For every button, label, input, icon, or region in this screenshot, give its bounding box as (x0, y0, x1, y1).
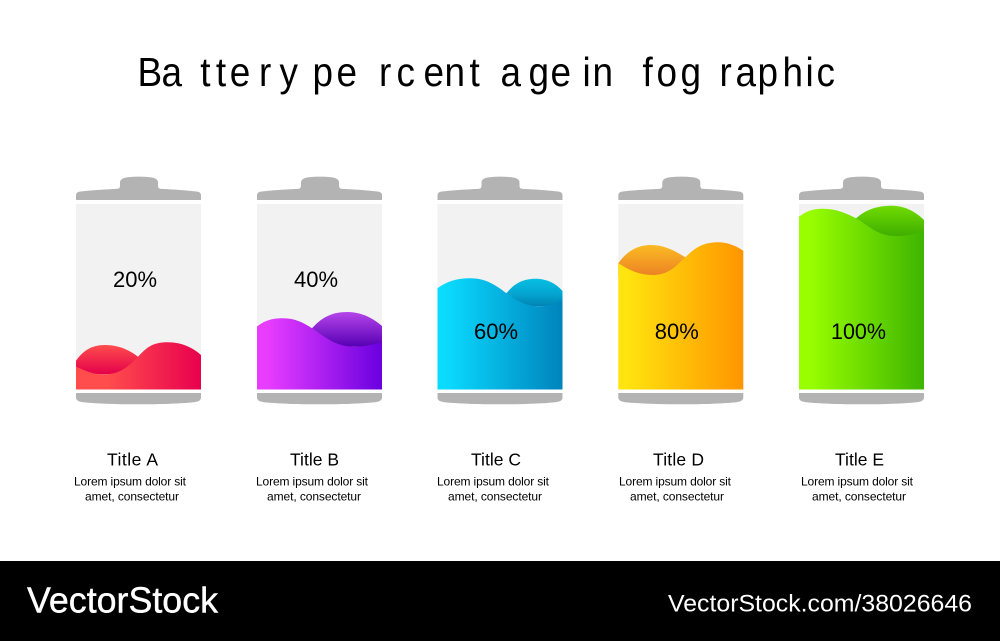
caption D: amet, consectetur (630, 490, 724, 504)
battery A: 20% (76, 177, 201, 404)
caption A: amet, consectetur (85, 490, 179, 504)
caption B: Lorem ipsum dolor sit (256, 474, 369, 488)
caption D: Lorem ipsum dolor sit (619, 474, 732, 488)
caption A (74, 450, 187, 504)
caption C: Lorem ipsum dolor sit (437, 474, 550, 488)
caption B: amet, consectetur (267, 490, 361, 504)
percentage label: 100% (831, 319, 886, 344)
caption C: amet, consectetur (448, 490, 542, 504)
caption B (256, 450, 369, 504)
battery E: 100% (799, 177, 924, 404)
caption E: Title E (835, 450, 884, 470)
watermark logo: VectorStock (27, 580, 219, 620)
title: Battery percentage infographic (138, 50, 835, 95)
caption D (619, 450, 732, 504)
caption E: Lorem ipsum dolor sit (801, 474, 914, 488)
caption C: Title C (471, 450, 521, 470)
percentage label: 60% (474, 319, 518, 344)
caption A: Title A (107, 450, 158, 470)
battery D: 80% (618, 177, 743, 404)
percentage label: 20% (113, 267, 157, 292)
caption A: Lorem ipsum dolor sit (74, 474, 187, 488)
caption B: Title B (290, 450, 339, 470)
caption E: amet, consectetur (812, 490, 906, 504)
percentage label: 80% (655, 319, 699, 344)
watermark footer bar (0, 561, 1000, 641)
caption C (437, 450, 550, 504)
percentage label: 40% (294, 267, 338, 292)
watermark url: VectorStock.com/38026646 (668, 590, 972, 618)
caption D: Title D (653, 450, 704, 470)
battery C: 60% (438, 177, 562, 404)
battery B: 40% (257, 177, 382, 404)
caption E (801, 450, 914, 504)
